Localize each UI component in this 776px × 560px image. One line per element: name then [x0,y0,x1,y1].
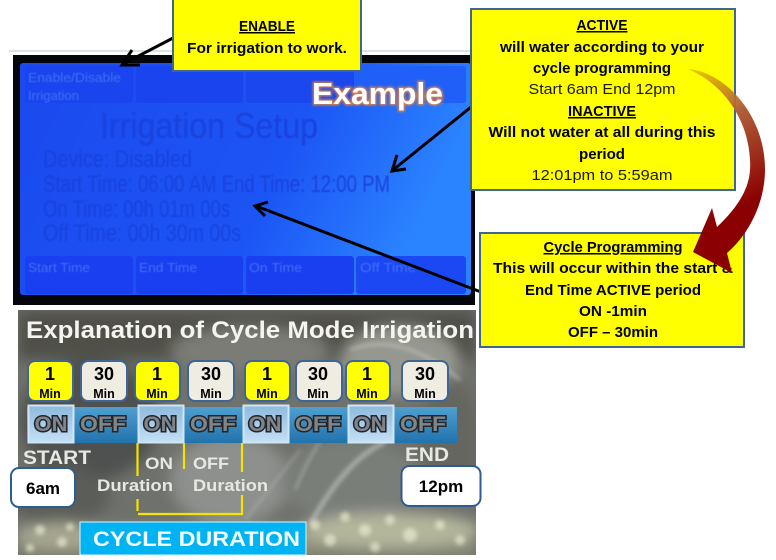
callout: active and inactive: Will not water at all during this [488,124,716,141]
bottom screen buttons: End Time [139,260,197,275]
callout: active and inactive: period [579,146,625,163]
photo background [10,310,480,555]
duration tiles [28,361,448,401]
duration tile labels: 30 [308,364,328,384]
duration tile labels: Min [307,387,329,401]
duration tile labels: 1 [362,364,372,384]
callout: cycle programming: OFF – 30min [568,324,658,341]
panel title: Explanation of Cycle Mode Irrigation [26,317,474,344]
duration tile labels: 1 [45,364,55,384]
end time badge [402,466,480,506]
callout: active and inactive: ACTIVE [576,17,628,34]
duration tile labels: Min [414,387,436,401]
duration tile labels: Min [93,387,115,401]
yellow cycle bracket [138,443,242,514]
cycle duration banner: CYCLE DURATION [93,528,300,551]
duration tile labels: 30 [201,364,221,384]
callout: enable: ENABLE [239,18,295,35]
arrow: active callout to start and end time [392,107,471,171]
on off switch strip [27,406,457,443]
cycle duration banner [80,522,306,555]
end time badge: 12pm [419,477,463,496]
on off switch strip: ON [144,413,176,436]
on off switch strip: ON [248,413,282,436]
bottom screen buttons: Off Time [360,260,416,275]
bottom screen buttons: On Time [249,260,302,275]
callout: enable: For irrigation to work. [187,40,347,57]
bottom screen buttons: Start Time [28,260,90,275]
duration tile labels [39,364,436,401]
start time badge: 6am [26,479,60,498]
on off switch strip: OFF [80,413,126,436]
screen settings text: On Time: 00h 01m 00s [43,196,230,223]
top screen buttons: Enable/Disable [28,70,121,85]
example label: Example [312,76,443,111]
top screen buttons [25,66,466,103]
duration tile labels: Min [200,387,222,401]
callout: cycle programming: ON -1min [579,303,647,320]
duration tile labels: Min [146,387,168,401]
panel: irrigation setup screen [13,55,475,305]
callout: cycle programming: End Time ACTIVE period [525,282,701,299]
callout: active and inactive [471,9,735,190]
callout: active and inactive: 12:01pm to 5:59am [532,167,672,184]
screen heading: Irrigation Setup [100,105,318,146]
on off switch strip: OFF [400,413,446,436]
top screen buttons: Irrigation [28,88,79,103]
callout: active and inactive: will water according to your [499,39,704,56]
example label: Example [312,76,443,111]
panel: cycle mode explanation [10,310,480,555]
callout: enable [173,0,361,71]
on off switch strip: ON [34,413,68,436]
start label: START [23,448,91,469]
arrow: cycle callout to on and off time [255,202,481,292]
start time badge [11,468,75,507]
duration tile labels: Min [256,387,278,401]
duration tile labels: 1 [262,364,272,384]
callout: cycle programming: This will occur within the start & [493,260,733,277]
duration tile labels: 30 [415,364,435,384]
duration tile labels: 1 [152,364,162,384]
on off switch strip: OFF [295,413,341,436]
screen settings text [43,146,390,247]
callout: cycle programming: Cycle Programming [544,239,682,256]
on off switch strip: OFF [190,413,236,436]
duration tile labels: Min [356,387,378,401]
duration tile labels: 30 [94,364,114,384]
callout: active and inactive: cycle programming [533,60,671,77]
on and off duration labels: ON [145,454,173,473]
on and off duration labels: Duration [193,476,268,495]
screen settings text: Start Time: 06:00 AM End Time: 12:00 PM [43,171,390,198]
on and off duration labels [97,454,268,495]
callout: active and inactive: Start 6am End 12pm [528,81,676,98]
end label: END [405,445,449,466]
callout: active and inactive: INACTIVE [568,103,636,120]
on and off duration labels: Duration [97,476,173,495]
on off switch strip: ON [354,413,386,436]
arrow: curved red arrow from active to cycle programming [688,69,765,273]
bottom screen buttons [25,256,466,294]
callout: cycle programming [480,233,744,347]
screen settings text: Device: Disabled [43,146,192,173]
arrow: enable callout to button [122,37,175,65]
screen settings text: Off Time: 00h 30m 00s [43,220,241,247]
on and off duration labels: OFF [193,454,229,473]
duration tile labels: Min [39,387,61,401]
